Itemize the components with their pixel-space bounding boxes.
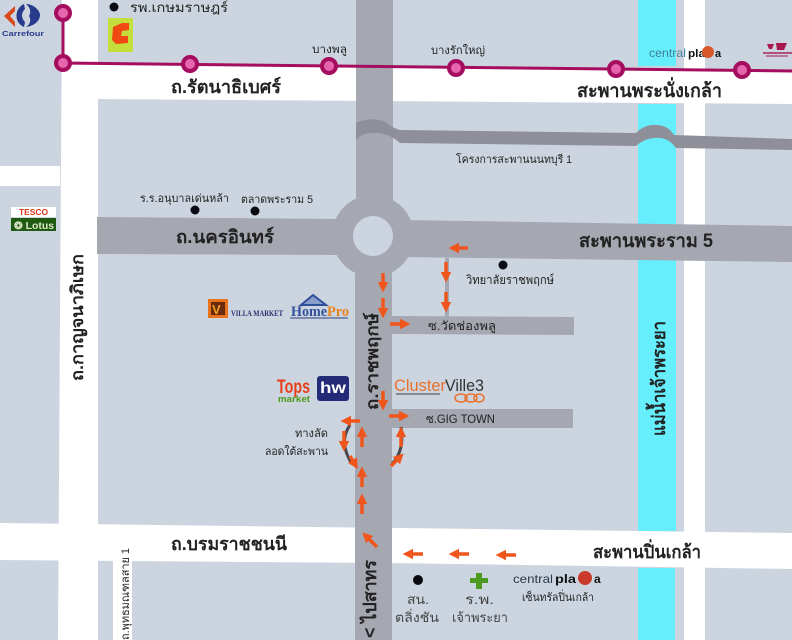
logo: Villa Market: V [212,302,221,317]
road and place labels: ถ.ราชพฤกษ์ [362,313,382,410]
logo: Tops market: Tops [277,377,310,398]
road and place labels: ถ.นครอินทร์ [176,226,274,247]
road and place labels: สน. [407,592,429,607]
road and place labels: ร.ร.อนุบาลเด่นหล้า [140,193,229,205]
logo: Villa Market: VILLA MARKET [231,309,284,318]
logo: central plaza top: a [715,48,722,60]
logo: Tops market: market [278,394,310,404]
road and place labels: โครงการสะพานนนทบุรี 1 [456,152,572,166]
river [638,0,676,640]
logo: Tesco Lotus: TESCO [19,208,48,217]
road and place labels: ร.พ. [465,592,494,607]
logo: Tops market [277,377,310,404]
road and place labels: สะพานพระราม 5 [579,231,713,252]
road and place labels: ถ.บรมราชชนนี [171,534,288,554]
logo: HomePro: Home [291,304,327,320]
road and place labels: ซ.GIG TOWN [426,412,495,426]
road and place labels: เจ้าพระยา [452,610,508,625]
logo: Carrefour [2,4,44,38]
road and place labels: ลอดใต้สะพาน [265,445,328,458]
road and place labels: แม่น้ำเจ้าพระยา [645,321,669,436]
road and place labels: ตลิ่งชัน [395,609,439,625]
logo: HomePro: Pro [327,304,349,320]
station markers [56,6,749,77]
arrows: Pin Klao bridge westbound [412,552,423,556]
logo: Carrefour: Carrefour [2,29,44,38]
logo: HomePro [290,295,349,320]
logo: Cluster Ville 3 [394,376,484,402]
road and place labels: ถ.กาญจนาภิเษก [68,254,88,381]
road and place labels: บางพลู [312,44,347,56]
arrows: shortcut [350,419,360,423]
logo: central plaza bottom: central [513,572,553,586]
logo: central plaza bottom: a [594,572,601,586]
logo: central plaza top: pla [688,48,706,60]
logo: hw: hw [320,380,347,397]
arrows: Ratchaphruek north [360,436,364,447]
arrows: side lane south [444,262,448,273]
logo: central plaza top: central [649,46,686,60]
road and place labels: สะพานปิ่นเกล้า [593,539,701,562]
road and place labels: เซ็นทรัลปิ่นเกล้า [522,589,594,604]
purple line [56,6,792,77]
logo: Tesco Lotus: ❂ Lotus [13,221,54,232]
arrow: Rama 5 bridge westbound [458,246,468,250]
logo: Tesco Lotus [11,207,56,232]
shortcut under bridge curves [344,425,402,464]
planned Nonthaburi 1 bridge road [356,119,792,150]
logo: central plaza top [649,46,722,60]
logo: Big C [108,18,133,52]
location dots [110,2,508,585]
road and place labels: สะพานพระนั่งเกล้า [577,77,722,102]
logo: hw [317,376,349,401]
road and place labels: ถ.พุทธมณฑลสาย 1 [120,548,132,640]
roundabout island [353,216,393,256]
logo: Cluster Ville 3: Cluster [394,376,446,395]
road and place labels: วิทยาลัยราชพฤกษ์ [466,273,554,287]
logo: Villa Market [208,299,284,318]
road and place labels: ถ.รัตนาธิเบศร์ [171,76,281,97]
road and place labels: บางรักใหญ่ [431,44,485,57]
icon: hospital cross [470,573,488,589]
logo: top right mall [763,43,792,57]
traffic arrows [344,248,516,555]
logo: Cluster Ville 3: Ville3 [445,376,484,395]
road and place labels: ตลาดพระราม 5 [241,194,313,206]
road and place labels: < ไปสาทร [359,560,380,638]
logo: central plaza bottom: pla [555,572,576,586]
road and place labels: ซ.วัดช่องพลู [428,319,496,334]
arrows: into sois [390,322,401,326]
road and place labels: ทางลัด [295,428,328,440]
logo: central plaza bottom [513,571,601,586]
road and place labels: รพ.เกษมราษฎร์ [130,0,228,15]
arrows: Ratchaphruek south [381,273,385,283]
